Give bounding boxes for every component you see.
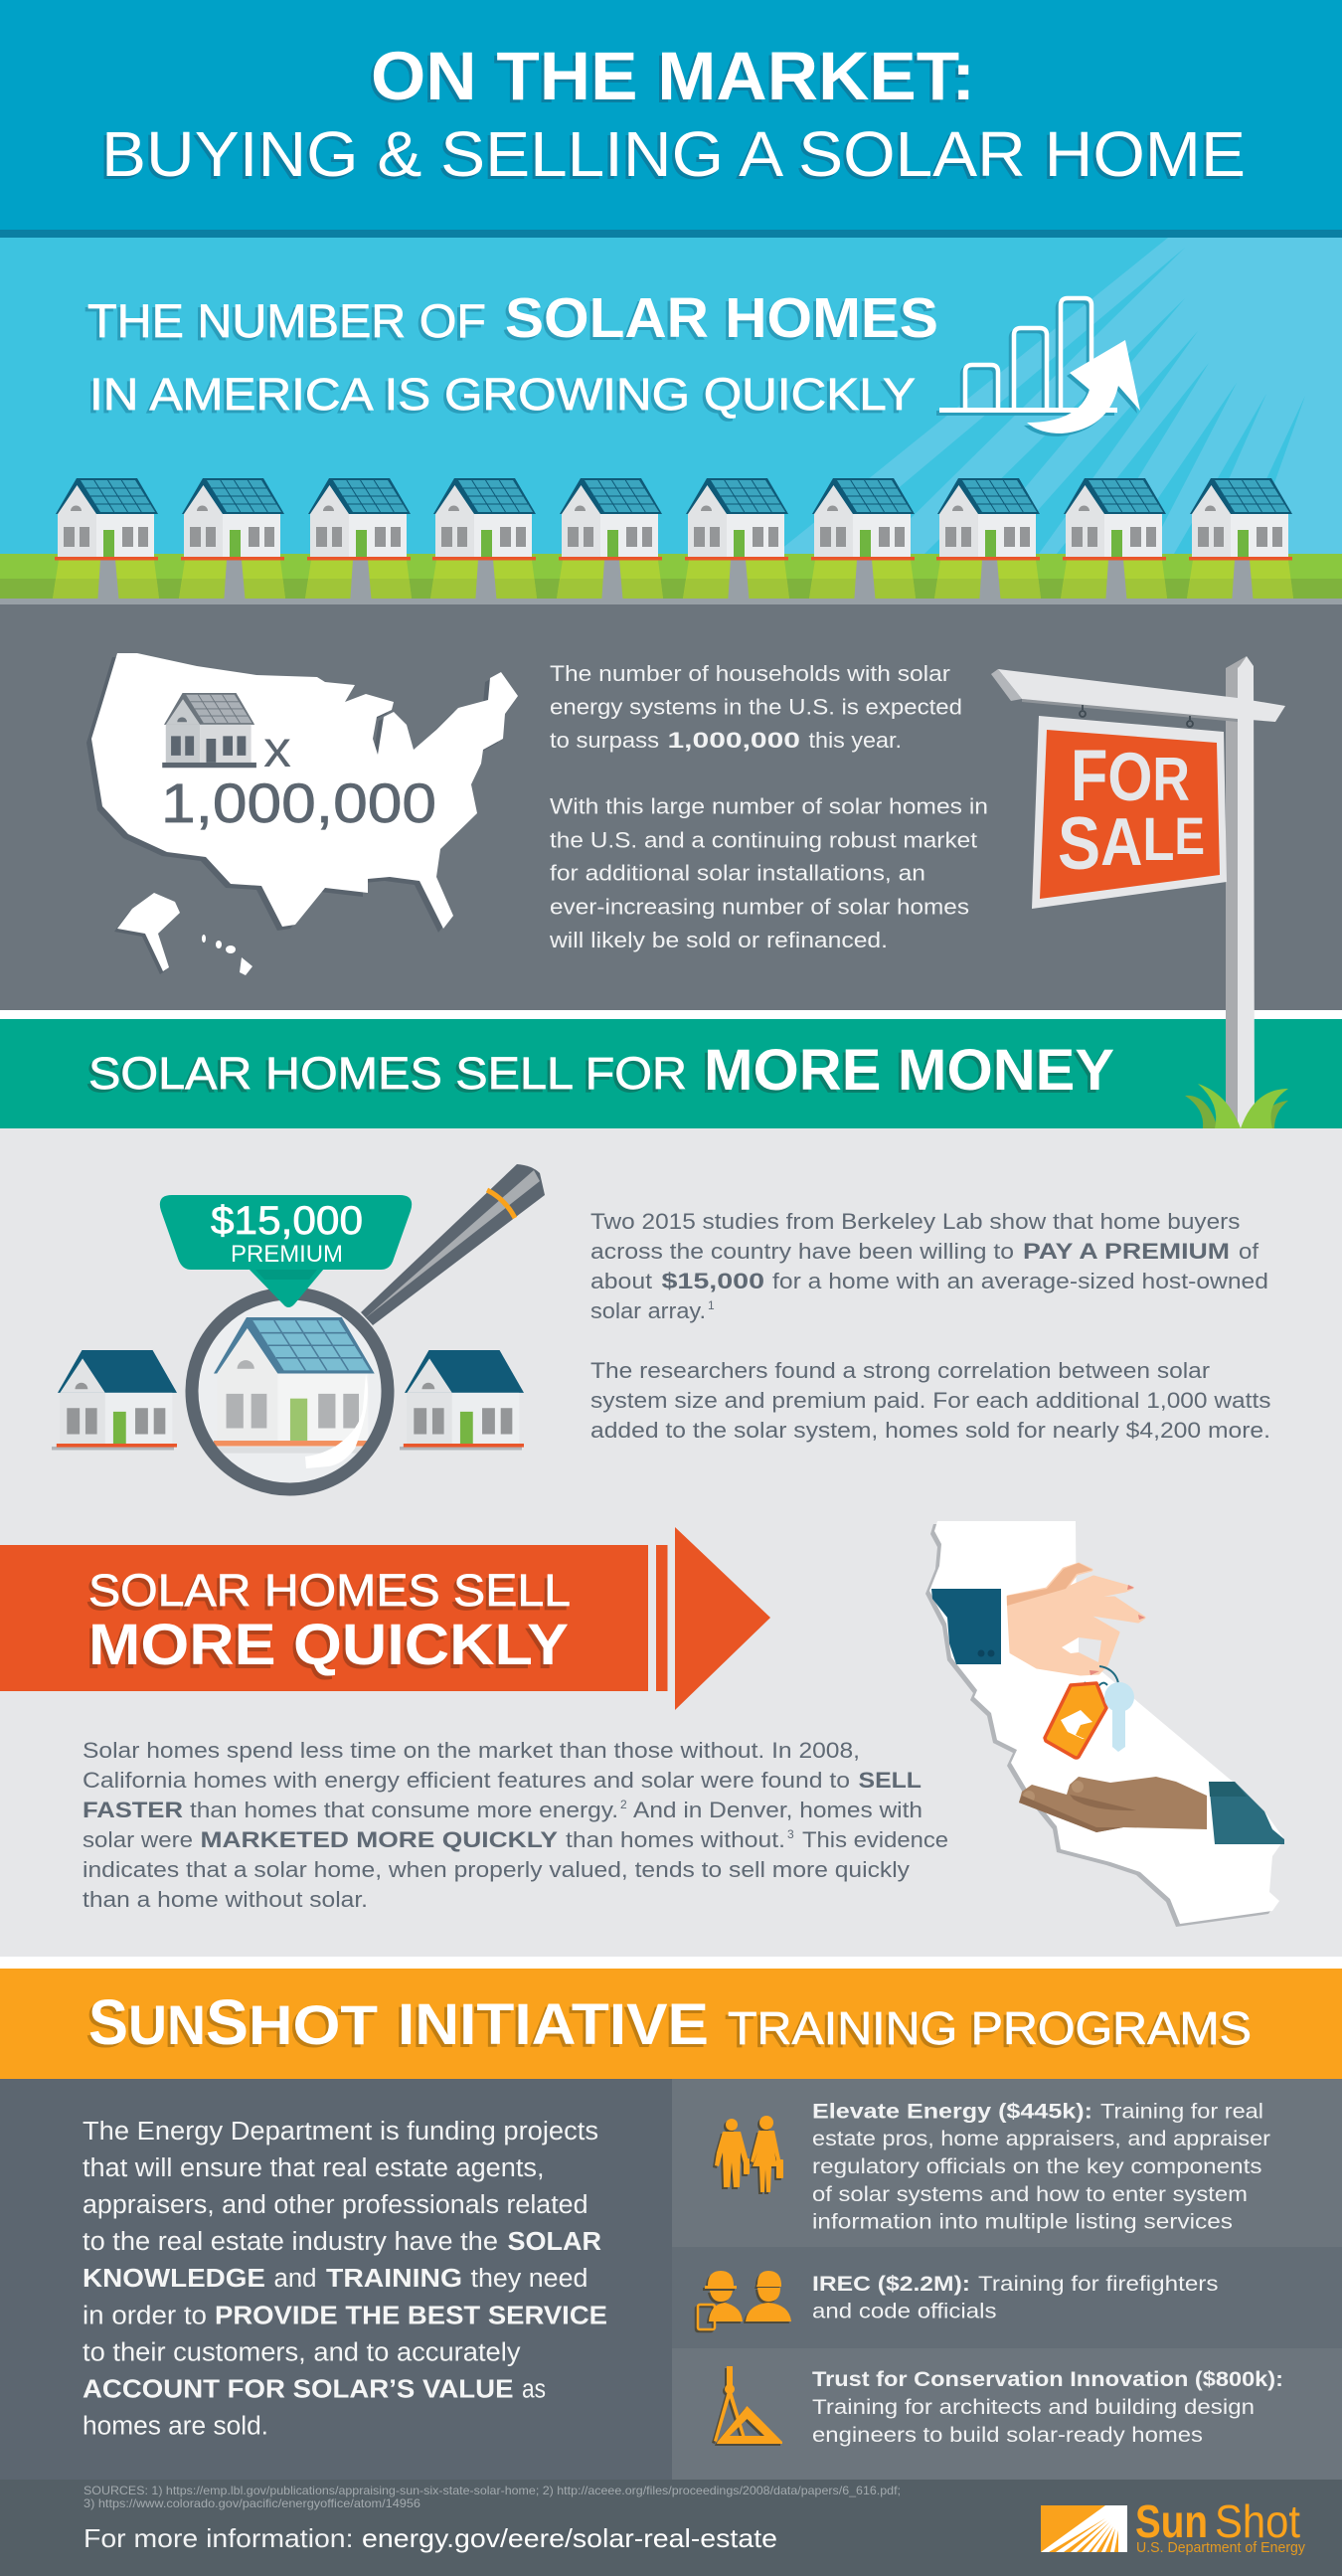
text: households paragraph: The number of households with solar [550,661,951,686]
text: sell quickly paragraph: than a home without solar. [83,1887,368,1912]
text: sell quickly paragraph [83,1738,948,1912]
text: Elevate Energy: information into multiple listing services [812,2209,1233,2233]
illustration: for sale sign [991,656,1288,1128]
small house left [52,1350,177,1450]
panel: one million households [0,604,1342,1019]
logo: SunShot: U.S. Department of Energy [1136,2539,1305,2556]
illustration: California with hands exchanging keys [925,1521,1284,1927]
text: sell quickly paragraph: Solar homes spend less time on the market than those without. In 2008, [83,1738,860,1763]
text: energy department paragraph: and [274,2265,316,2293]
key tag [1045,1683,1106,1758]
text: energy department paragraph: KNOWLEDGE [83,2265,265,2293]
text: energy department paragraph [83,2118,607,2440]
text: sources: 3) https://www.colorado.gov/pacific/energyoffice/atom/14956 [84,2496,420,2510]
text: IREC [812,2272,1219,2322]
text: premium paragraphs: for a home with an average-sized host-owned [772,1269,1268,1293]
icon: firefighter and code official [698,2271,791,2329]
sign text: FOR [1071,736,1190,816]
text: premium paragraphs [590,1209,1270,1443]
text: premium paragraphs: about [590,1269,653,1293]
panel: Elevate Energy [672,2079,1342,2247]
text: households paragraph: the U.S. and a continuing robust market [550,827,978,853]
footer [0,2480,1342,2576]
heading: SunShot Initiative training programs: INITIATIVE [398,1992,709,2057]
heading: more quickly: SOLAR HOMES SELL [88,1565,571,1616]
heading: more quickly [88,1565,571,1677]
text: households paragraph: 1,000,000 [668,728,800,753]
heading: number of solar homes [87,286,938,420]
text: households paragraph [549,661,988,952]
heading: SunShot Initiative training programs: UN [128,1993,206,2056]
text: energy department paragraph: to the real estate industry have the [83,2228,498,2256]
panel: SunShot training programs [0,1957,1342,2480]
icon: gray house [162,693,256,768]
text: sell quickly paragraph: This evidence [802,1827,948,1852]
text: Elevate Energy: regulatory officials on the key components [812,2154,1262,2178]
premium tag [160,1195,412,1307]
key [1104,1682,1134,1752]
text: premium paragraphs: of [1239,1239,1259,1264]
magnifier ring [192,1293,388,1489]
text: Elevate Energy: Training for real [1100,2100,1263,2124]
text: IREC: and code officials [812,2299,996,2322]
title: BUYING & SELLING A SOLAR HOME [101,118,1246,190]
text: energy department paragraph: ACCOUNT FOR SOLAR’S VALUE [83,2376,513,2404]
text: energy department paragraph: to their customers, and to accurately [83,2338,521,2366]
logo: SunShot: Sun [1135,2495,1208,2547]
magnifier handle [361,1164,545,1325]
text: sell quickly paragraph: And in Denver, homes with [633,1798,923,1822]
text: sources: SOURCES: 1) https://emp.lbl.gov/publications/appraising-sun-six-state-solar-home; 2) http://aceee.org/files/proceedings/2008/data/papers/6_616.pdf; [84,2484,901,2497]
logo: SunShot [1041,2495,1305,2556]
text: households paragraph: will likely be sold or refinanced. [549,928,888,952]
panel: IREC [672,2247,1342,2348]
arrow banner: sell more quickly [0,1527,770,1710]
text: sell quickly paragraph: California homes with energy efficient features and solar were found to [83,1768,850,1793]
text: sell quickly paragraph: 2 [620,1798,627,1811]
text: Elevate Energy: of solar systems and how to enter system [812,2182,1248,2206]
text: sell quickly paragraph: MARKETED MORE QUICKLY [201,1827,558,1852]
cross bar [991,669,1285,722]
hand: receiving [1019,1777,1207,1832]
text: Trust for Conservation Innovation: Training for architects and building design [812,2395,1255,2419]
center solar house [214,1317,375,1454]
text: premium paragraphs: PAY A PREMIUM [1023,1239,1230,1264]
premium tag: PREMIUM [231,1241,343,1268]
heading: SunShot Initiative training programs: HOT [249,1993,378,2056]
text: households paragraph: ever-increasing number of solar homes [550,895,969,919]
text: more information: For more information: [84,2523,354,2553]
ground [0,554,1342,604]
text: premium paragraphs: solar array. [590,1298,706,1323]
row of solar houses [53,478,1293,604]
text: IREC: Training for firefighters [978,2272,1219,2296]
icon: compass and triangle ruler [714,2366,782,2444]
text: households paragraph: With this large number of solar homes in [550,793,988,819]
icon: business people [715,2116,783,2192]
heading: more quickly: MORE QUICKLY [88,1613,569,1677]
text: Elevate Energy [812,2100,1270,2233]
text: energy department paragraph: TRAINING [326,2265,462,2293]
sleeve: teal [1209,1782,1284,1844]
text: energy department paragraph: as [522,2376,546,2404]
text: IREC: IREC ($2.2M): [812,2272,970,2296]
hand: giving [1007,1563,1145,1675]
sign text: S [1058,801,1100,885]
sleeve: navy [931,1589,1001,1664]
heading: more money: SOLAR HOMES SELL FOR [88,1048,687,1099]
logo: SunShot: Shot [1215,2495,1300,2547]
sign board [1032,716,1227,909]
text: Trust for Conservation Innovation [812,2367,1283,2447]
text: sell quickly paragraph: 3 [787,1827,794,1841]
text: energy department paragraph: homes are sold. [83,2412,268,2440]
text: Elevate Energy: estate pros, home appraisers, and appraiser [812,2127,1270,2150]
text: sell quickly paragraph: than homes that consume more energy. [190,1798,618,1822]
heading: number of solar homes: IN AMERICA IS GROWING QUICKLY [89,369,916,420]
text: households paragraph: for additional solar installations, an [550,861,925,885]
heading: SunShot Initiative training programs: S [88,1986,128,2058]
sun rays [775,238,1342,554]
sign text: L [1142,805,1175,873]
sign text [1058,736,1205,885]
text: energy department paragraph: The Energy Department is funding projects [83,2118,598,2146]
text: sell quickly paragraph: than homes without. [566,1827,785,1852]
panel: solar homes growing [0,238,1342,604]
small house right [400,1350,524,1450]
text: sell quickly paragraph: solar were [83,1827,193,1852]
text: Trust for Conservation Innovation: engineers to build solar-ready homes [812,2423,1203,2447]
heading: number of solar homes: SOLAR HOMES [505,286,938,350]
text: premium paragraphs: $15,000 [662,1269,764,1293]
text: sell quickly paragraph: FASTER [83,1798,183,1822]
sign text: A [1100,804,1142,880]
heading: more money: MORE MONEY [704,1038,1114,1103]
text: premium paragraphs: added to the solar system, homes sold for nearly $4,200 more. [590,1418,1270,1443]
title [101,38,1246,190]
heading: more money [88,1038,1114,1103]
title: ON THE MARKET: [371,38,975,114]
heading: SunShot Initiative training programs: S [206,1986,249,2058]
sign post [1226,656,1247,1128]
number: 1,000,000: 1,000,000 [161,772,436,834]
text: more information: energy.gov/eere/solar-real-estate [362,2523,777,2553]
grass tuft [1185,1084,1288,1128]
heading: SunShot Initiative training programs: TRAINING PROGRAMS [728,2002,1252,2054]
text: households paragraph: this year. [809,728,902,753]
text: sources [84,2484,901,2510]
text: premium paragraphs: Two 2015 studies from Berkeley Lab show that home buyers [590,1209,1241,1234]
text: more information [84,2523,777,2553]
text: energy department paragraph: they need [471,2265,588,2293]
panel: header [0,0,1342,238]
text: households paragraph: energy systems in the U.S. is expected [550,694,962,720]
map: California [925,1521,1284,1927]
heading: number of solar homes: THE NUMBER OF [87,294,486,347]
text: Elevate Energy: Elevate Energy ($445k): [812,2100,1092,2124]
key ring [1084,1666,1118,1693]
premium tag: $15,000 [211,1199,363,1243]
text: energy department paragraph: in order to [83,2303,207,2330]
panel: sell for more money banner [0,1019,1342,1128]
text: premium paragraphs: The researchers found a strong correlation between solar [590,1358,1211,1383]
illustration: houses under magnifying glass [52,1164,545,1489]
text: premium paragraphs: across the country have been willing to [590,1239,1014,1264]
text: households paragraph: to surpass [550,728,659,753]
text: energy department paragraph: appraisers, and other professionals related [83,2191,588,2219]
text: energy department paragraph: that will ensure that real estate agents, [83,2154,545,2182]
text: sell quickly paragraph: SELL [859,1768,922,1793]
panel: Trust for Conservation Innovation [672,2348,1342,2480]
text: energy department paragraph: SOLAR [507,2228,601,2256]
icon: rising bar chart with arrow [939,298,1140,433]
sign text: E [1175,807,1205,866]
multiplier x: x [263,721,291,778]
text: Trust for Conservation Innovation: Trust for Conservation Innovation ($800k): [812,2367,1283,2391]
map: United States with house times 1,000,000 [86,653,518,975]
text: sell quickly paragraph: indicates that a solar home, when properly valued, tends to sell more quickly [83,1857,911,1882]
hooks [1080,705,1193,727]
text: energy department paragraph: PROVIDE THE BEST SERVICE [215,2303,607,2330]
panel: premium [0,1128,1342,1957]
heading: SunShot Initiative training programs [88,1986,1252,2058]
text: premium paragraphs: system size and premium paid. For each additional 1,000 watts [590,1388,1270,1413]
glass glare [305,1374,368,1468]
text: premium paragraphs: 1 [708,1298,715,1312]
magnifier glass [199,1300,382,1483]
